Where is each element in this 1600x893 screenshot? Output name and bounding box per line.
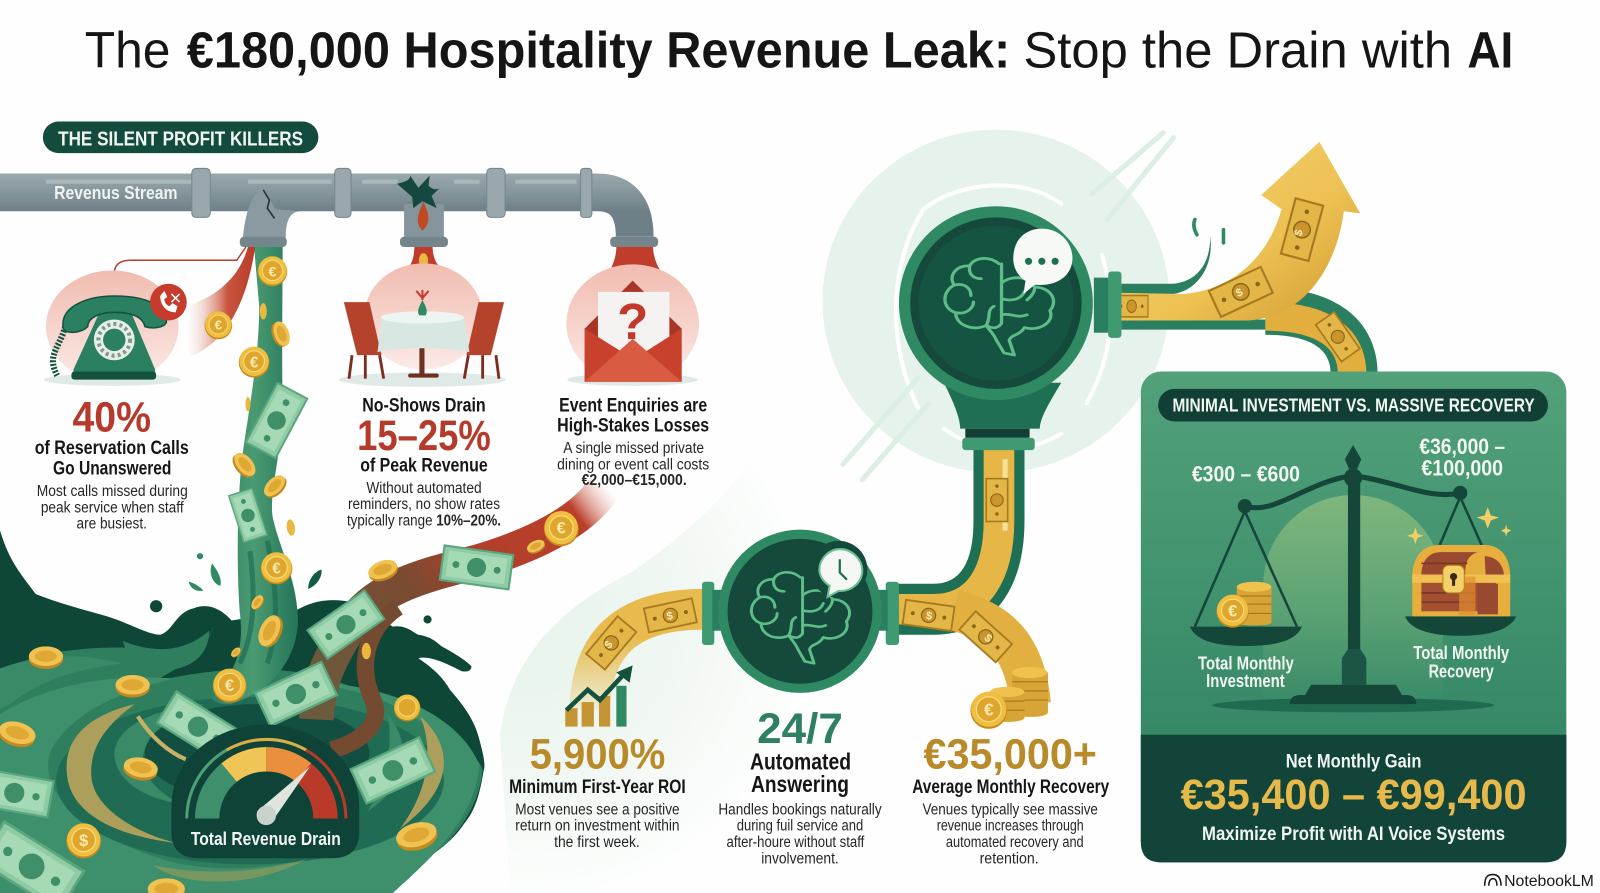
recovery amount: €36,000 – [1419, 434, 1505, 459]
panel: investment vs recovery [1141, 372, 1566, 862]
stat: 24/7 automated answering: Answering [751, 771, 849, 797]
gold pipe down to coins [903, 600, 1031, 704]
title: The [85, 21, 170, 78]
stat: event enquiries: €2,000–€15,000. [582, 472, 687, 489]
stat: 35,000 euro monthly recovery: €35,000+ [923, 730, 1097, 778]
stat: 35,000 euro monthly recovery: Venues typically see massive [922, 801, 1098, 818]
stat: no-shows 15-25 percent: Without automated [366, 480, 482, 497]
icon: restaurant table [339, 247, 506, 387]
investment label: Investment [1206, 670, 1285, 691]
icon: coin stacks [970, 667, 1048, 729]
stat: 5,900 percent ROI: return on investment within [515, 818, 680, 835]
stat: 35,000 euro monthly recovery [912, 730, 1109, 867]
stat: no-shows 15-25 percent: 15–25% [357, 412, 491, 460]
stat: 24/7 automated answering: Automated [750, 748, 851, 774]
recovery label [1413, 642, 1510, 682]
stat: 24/7 automated answering: during fuil service and [737, 818, 863, 835]
investment label: Total Monthly [1198, 652, 1295, 673]
recovery amount [1419, 434, 1505, 481]
AI voice node 1 halo [822, 130, 1173, 480]
icon: treasure chest [1407, 507, 1511, 616]
coins and bills in the pool: € [557, 520, 566, 538]
recovery label: Total Monthly [1413, 642, 1510, 663]
AI node 1 with brain and chat bubble [899, 206, 1121, 450]
panel heading [1158, 389, 1548, 422]
background mint swoosh [500, 97, 1190, 893]
stat: event enquiries: High-Stakes Losses [557, 415, 709, 437]
title: €180,000 Hospitality Revenue Leak: [187, 21, 1010, 78]
gold pipe left of AI node 2: $ [665, 610, 675, 623]
stat: 24/7 automated answering: 24/7 [757, 705, 843, 753]
stat: 35,000 euro monthly recovery: Average Monthly Recovery [912, 776, 1109, 798]
stat: event enquiries: Event Enquiries are [559, 394, 707, 416]
heading pill: the silent profit killers [43, 122, 318, 153]
stat: 5,900 percent ROI [509, 730, 686, 851]
icon: event enquiry envelope [566, 247, 699, 386]
title [85, 21, 1513, 78]
stat: 40 percent unanswered: peak service when staff [41, 499, 184, 516]
coins and bills in the pool: € [225, 677, 234, 695]
coins and bills in the stream: € [250, 354, 259, 371]
investment label [1198, 652, 1295, 691]
gauge: total revenue drain [171, 725, 359, 858]
gold pipe left of AI node 2 [586, 598, 704, 709]
stat: event enquiries: A single missed private [563, 440, 704, 457]
gold pipe up to AI node 1 and arrow: $ [1234, 286, 1246, 300]
stat: no-shows 15-25 percent: of Peak Revenue [360, 454, 488, 476]
red to brown stream [316, 488, 604, 750]
stat: 40 percent unanswered: of Reservation Calls [35, 437, 189, 459]
gold pipe up to AI node 1 and arrow: $ [1293, 228, 1306, 238]
gold pipe down to coins: $ [981, 632, 995, 646]
NotebookLM mark: NotebookLM [1504, 873, 1594, 890]
net gain band: Maximize Profit with AI Voice Systems [1202, 823, 1505, 845]
stat: 35,000 euro monthly recovery: revenue increases through [937, 818, 1084, 835]
stat: 24/7 automated answering: Handles bookings naturally [718, 801, 882, 818]
coins and bills in the pool [0, 511, 579, 893]
stat: 35,000 euro monthly recovery: automated recovery and [946, 834, 1084, 851]
green money stream [209, 247, 298, 704]
coins and bills in the stream: € [215, 318, 223, 333]
stat: 40 percent unanswered: Most calls missed during [37, 483, 188, 500]
title: Stop the Drain with [1023, 21, 1452, 78]
stat: 5,900 percent ROI: Most venues see a positive [515, 801, 680, 818]
icon: small coin stack: € [1228, 602, 1237, 620]
drain pool [0, 531, 484, 893]
stat: event enquiries: dining or event call costs [557, 456, 709, 473]
icon: growth chart [565, 665, 633, 727]
stat: 24/7 automated answering: involvement. [761, 850, 839, 867]
stat: 24/7 automated answering: after-houre without staff [727, 834, 865, 851]
stat: no-shows 15-25 percent: typically range 10%–20%. [347, 513, 501, 530]
recovery label: Recovery [1429, 661, 1495, 682]
heading pill: the silent profit killers: THE SILENT PROFIT KILLERS [58, 128, 303, 150]
coins and bills in the stream [205, 256, 307, 659]
icon: coin stacks: € [984, 699, 994, 719]
stat: 35,000 euro monthly recovery: retention. [980, 850, 1039, 867]
gold pipe down to coins: $ [925, 610, 934, 623]
gauge: total revenue drain: Total Revenue Drain [191, 828, 341, 849]
gold pipe up to AI node 1 and arrow [898, 142, 1360, 609]
balance scale [1190, 445, 1516, 712]
stat: no-shows 15-25 percent: reminders, no show rates [348, 496, 500, 513]
coins and bills in the pool: $ [79, 832, 88, 850]
investment amount: €300 – €600 [1192, 462, 1300, 487]
stat: 40 percent unanswered: are busiest. [77, 516, 147, 533]
stat: 5,900 percent ROI: the first week. [554, 834, 640, 851]
icon: missed call telephone [44, 247, 255, 386]
stat: 40 percent unanswered: 40% [72, 394, 151, 442]
stat: 24/7 automated answering [718, 705, 882, 867]
stat: 40 percent unanswered [35, 394, 189, 533]
AI node 2 with brain and clock [702, 530, 899, 693]
net gain band: Net Monthly Gain [1286, 750, 1421, 772]
icon: burst pipe [397, 176, 440, 231]
stat: no-shows 15-25 percent: No-Shows Drain [362, 394, 486, 416]
net gain band [1141, 735, 1566, 862]
stat: 5,900 percent ROI: 5,900% [530, 730, 665, 778]
recovery amount: €100,000 [1421, 456, 1503, 481]
pipe system [0, 168, 658, 247]
stat: 5,900 percent ROI: Minimum First-Year ROI [509, 776, 686, 798]
title: AI [1467, 21, 1513, 78]
stat: 40 percent unanswered: Go Unanswered [53, 458, 171, 480]
coins and bills in the stream: € [272, 561, 281, 578]
icon: small coin stack [1216, 582, 1271, 628]
net gain band: €35,400 – €99,400 [1181, 771, 1527, 819]
gold pipe left of AI node 2: $ [602, 638, 616, 651]
icon: event enquiry envelope: ? [617, 293, 648, 350]
revenue stream label: Revenus Stream [54, 182, 178, 203]
stat: event enquiries [557, 394, 709, 489]
stat: no-shows 15-25 percent [347, 394, 501, 530]
coins and bills in the stream: € [268, 265, 276, 281]
